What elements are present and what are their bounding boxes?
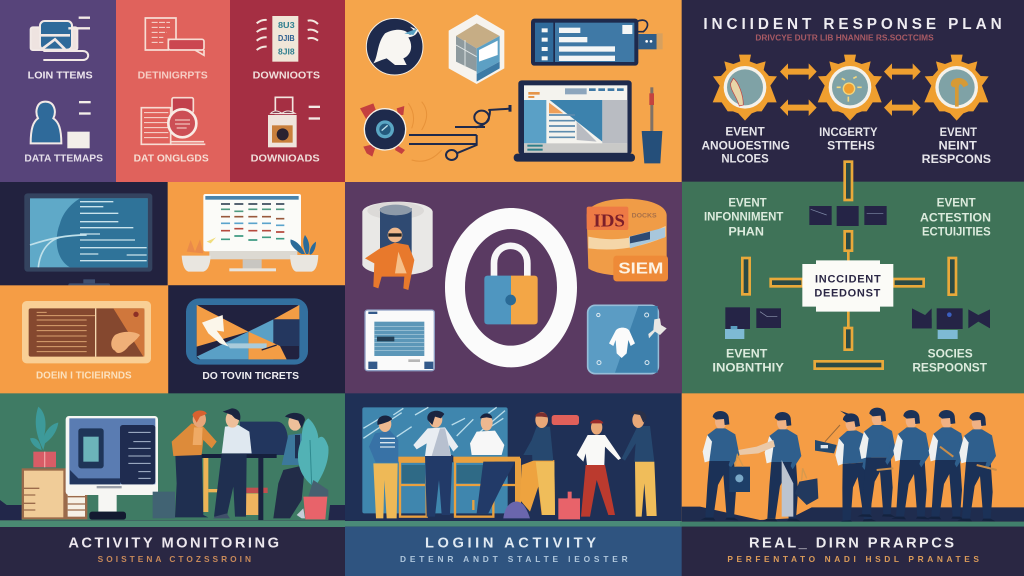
person: striped shirt [369,416,398,518]
icon: data sheet: 8JI8 [278,46,295,56]
large plant with pot [298,418,329,519]
icon: gauge [360,103,406,157]
panel: real drill practices [680,393,1024,576]
waste bin [153,492,175,518]
gear: event response [924,55,989,121]
label: down tickets: DOEIN I TICIEIRNDS [36,371,132,382]
mound [503,501,530,518]
icon: cable connectors [409,105,510,160]
footer bar [345,527,682,576]
subheading: SOISTENA CTOZSSROIN [98,554,251,564]
panel: orange dashboard [168,182,345,285]
gear labels: NLCOES [721,153,769,166]
footer bar [682,527,1024,576]
devices top [809,206,887,226]
flow labels: EVENT [728,197,767,210]
gear labels: INCGERTY [819,126,878,139]
connectors around centre [742,231,956,369]
shopping bag [729,455,750,492]
label: downloads: DOWNIOOTS [253,71,320,82]
icon: scanner card [365,310,434,371]
label: login items: LOIN TTEMS [28,71,93,82]
flow labels [704,197,991,375]
desktop monitor with table [203,194,301,271]
flow labels: ACTESTION [920,212,991,225]
icon: download package [268,97,320,147]
gear labels: ANOUOESTING [701,139,790,152]
tablet [22,301,151,363]
devices lower right [912,308,990,339]
icon: document and chat bubble [145,18,204,55]
heading: login activity: LOGIIN ACTIVITY [425,536,596,552]
pink bag [558,492,580,519]
footer bar [0,527,345,576]
panel: navy device [168,285,345,394]
heading: real drill practices: REAL_ DIRN PRARPCS [749,536,954,552]
ground band [0,500,345,520]
gear labels [701,126,991,166]
flow labels: ECTUIJITIES [922,226,991,239]
device with split screen [186,298,308,365]
centre card: incident: INCCIDENT [815,273,881,285]
label: data downloads: DAT ONGLGDS [134,153,209,164]
panel: incident response plan [682,0,1024,182]
icon: magnified report [141,98,205,144]
gear labels: STTEHS [827,140,875,153]
icon: IDS SIEM database: IDS [593,211,625,231]
subheading: DETENR ANDT STALTE IEOSTER [400,554,628,564]
gear: event announcing [713,55,777,121]
monitor with code screen [24,193,152,287]
flow labels: SOCIES [928,348,973,361]
title: INCIIDENT RESPONSE PLAN [703,16,1002,33]
icon: person in vault [362,202,433,290]
arrows between gears [780,63,921,116]
icon: animal badge [366,18,423,75]
flow labels: PHAN [728,226,764,239]
ground silhouette [682,507,1024,522]
icon: blue panel with figure [588,305,667,374]
panel: activity monitoring [0,393,345,576]
label: downloads lower: DOWNIOADS [251,154,320,165]
table and chairs [388,456,521,517]
connector top [845,162,852,200]
person: centre white shirt [413,411,458,517]
glass wall [362,407,508,513]
gear: inquiry [818,55,882,121]
gear labels: EVENT [725,126,765,139]
worker handing bag [701,411,739,520]
icon: IDS SIEM database [587,199,668,281]
label: datasets: DETINIGRPTS [138,71,208,82]
icon: screwdriver in cup [642,87,662,163]
person in orange jacket [172,410,217,517]
icon: monitor stack [31,18,90,60]
cabinet with drawers [22,468,87,519]
panel: incident flow diagram [682,162,1024,394]
seated person [273,413,305,518]
potted plants [182,235,318,272]
tag [552,415,579,425]
panel: login items [0,0,116,182]
panel: login activity [345,393,682,576]
devices lower left [725,307,781,339]
panel: security centre [345,182,682,394]
monitor showing code [66,416,158,520]
icon: laptop [514,80,635,162]
centre card: incident: DEEDONST [814,287,881,299]
flow labels: EVENT [726,348,767,361]
label: do town tickets: DO TOVIN TICRETS [202,371,299,382]
panel: tools and laptop [345,0,682,182]
plant and pot left [30,407,58,467]
icon: user silhouette [31,102,61,143]
gear labels: NEINT [938,139,977,152]
worker receiving [738,412,801,521]
worker with clipboard [815,411,877,524]
carried bag [795,468,818,505]
icon: cube [449,14,504,84]
flow labels: INOBNTHIY [712,362,784,375]
gear labels: RESPCONS [922,153,991,166]
flow labels: EVENT [937,197,976,210]
heading: activity monitoring: ACTIVITY MONITORING [68,536,279,552]
flow labels: INFONNIMENT [704,211,783,224]
subtitle: DRIVCYE DUTR LIB HNANNIE RS.SOCTCIMS [755,33,934,42]
label: data items: DATA TTEMAPS [24,153,103,164]
held tools [877,447,997,470]
panel: dark monitor [0,182,168,287]
subheading: PERFENTATO NADI HSDL PRANATES [727,554,979,564]
divider strip [345,521,682,527]
gear labels: EVENT [940,126,977,139]
icon: IDS SIEM database: DOCKS [632,213,657,219]
person in white shirt [213,408,252,518]
panel: orange tablet [0,285,168,394]
divider strip [680,522,1024,527]
centre card: incident [802,260,893,312]
icon: data sheet: 8U3 [278,20,295,30]
panel: downloads [230,0,345,182]
person: red trousers [577,420,621,517]
person: navy jacket yellow pants [520,412,555,515]
divider strip [0,520,345,527]
person: right navy jacket [622,411,657,517]
panel: datasets [116,0,230,182]
person: seated white shirt [470,413,515,513]
line of workers [857,408,996,521]
icon: IDS SIEM database: SIEM [618,261,663,278]
icon: motion lines [408,102,442,161]
flow labels: RESPOONST [912,362,987,375]
icon: data sheet: DJIB [278,33,295,43]
icon: server card [531,19,663,66]
icon: data sheet [257,16,318,62]
icon: note with dashes [67,101,91,148]
monitor on desk [202,422,288,521]
icon: padlock [484,246,538,324]
big ring [445,208,577,367]
